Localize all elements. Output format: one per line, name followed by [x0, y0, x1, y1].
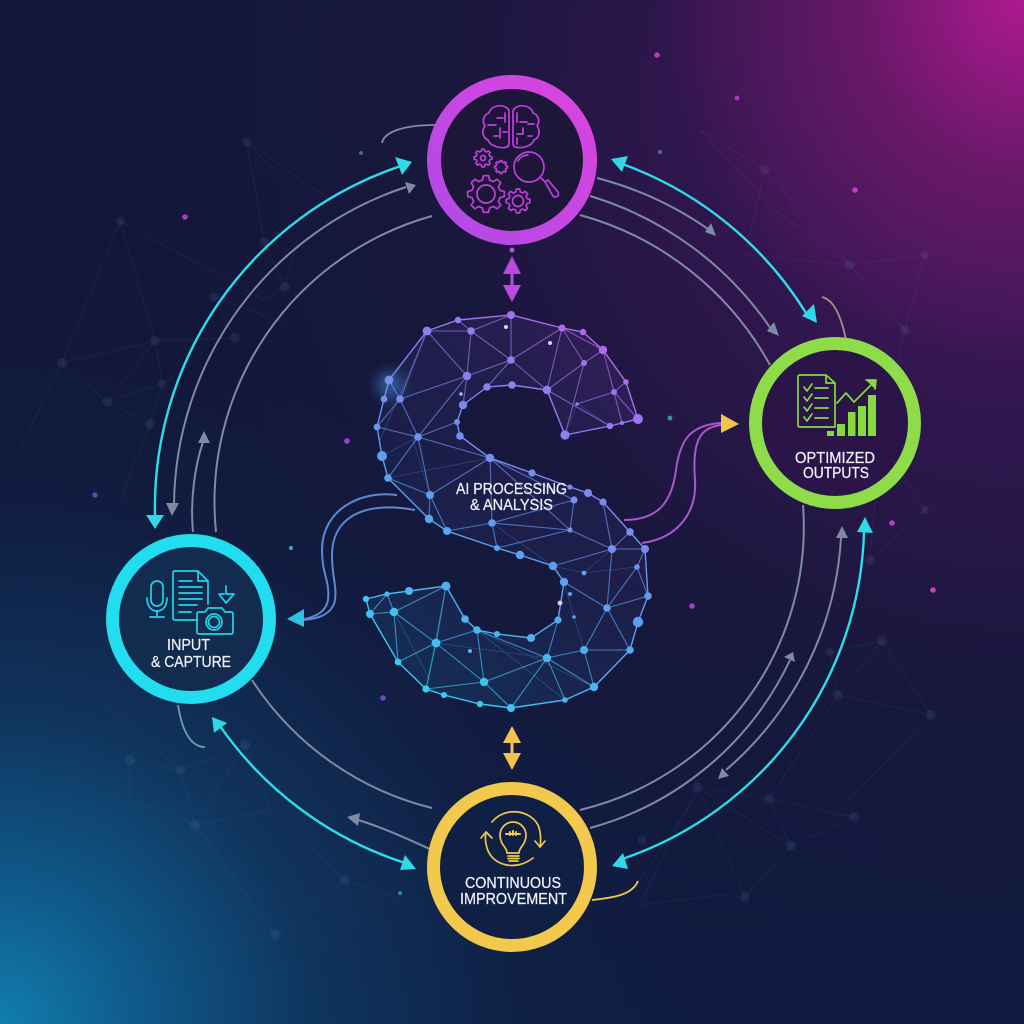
node: optimized outputs (right)	[756, 344, 914, 502]
center label: & ANALYSIS	[470, 497, 553, 514]
icon: light bulb with cycle arrows	[481, 812, 545, 865]
label: INPUT	[167, 637, 210, 654]
yellow arrowhead	[721, 414, 739, 433]
node: input and capture (left)	[112, 540, 270, 698]
S internal links	[370, 315, 648, 708]
node: input and capture (left): & CAPTURE	[151, 654, 231, 671]
icon: checklist and growth chart	[798, 375, 876, 436]
node: continuous improvement (bottom): IMPROVEMENT	[460, 891, 567, 908]
icon: brain, gears and magnifier	[468, 106, 559, 213]
S faint links	[380, 331, 637, 700]
center label: AI PROCESSING	[456, 481, 567, 498]
grey connector arcs	[174, 178, 841, 850]
grey arrowheads	[166, 182, 848, 826]
icon: mic, document, camera, download	[147, 571, 234, 634]
purple connector to outputs	[624, 414, 739, 543]
node: continuous improvement (bottom)	[434, 788, 590, 946]
cyan arrowheads	[146, 156, 873, 870]
ring	[434, 788, 590, 946]
double arrow: yellow	[503, 726, 521, 770]
blue connector to input	[287, 494, 415, 627]
ring	[112, 540, 270, 698]
node: optimized outputs (right): OUTPUTS	[803, 465, 869, 482]
S filled body and outline	[366, 315, 648, 708]
outer cyan cycle arcs	[155, 165, 864, 862]
ring	[434, 82, 590, 238]
small tail curves	[178, 125, 846, 900]
purple curved lines	[624, 423, 721, 543]
node: AI analysis (top)	[434, 82, 590, 238]
S nodes	[363, 311, 652, 712]
S glow	[376, 371, 404, 399]
label: CONTINUOUS	[465, 875, 561, 892]
scattered particles	[92, 52, 936, 895]
double arrow: purple	[503, 256, 521, 302]
faint background network	[20, 130, 931, 935]
blue arrowhead	[287, 609, 304, 627]
label: OPTIMIZED	[795, 450, 875, 467]
blue curved lines	[304, 494, 415, 620]
ring	[756, 344, 914, 502]
central S network	[363, 311, 652, 712]
center label	[456, 481, 567, 514]
